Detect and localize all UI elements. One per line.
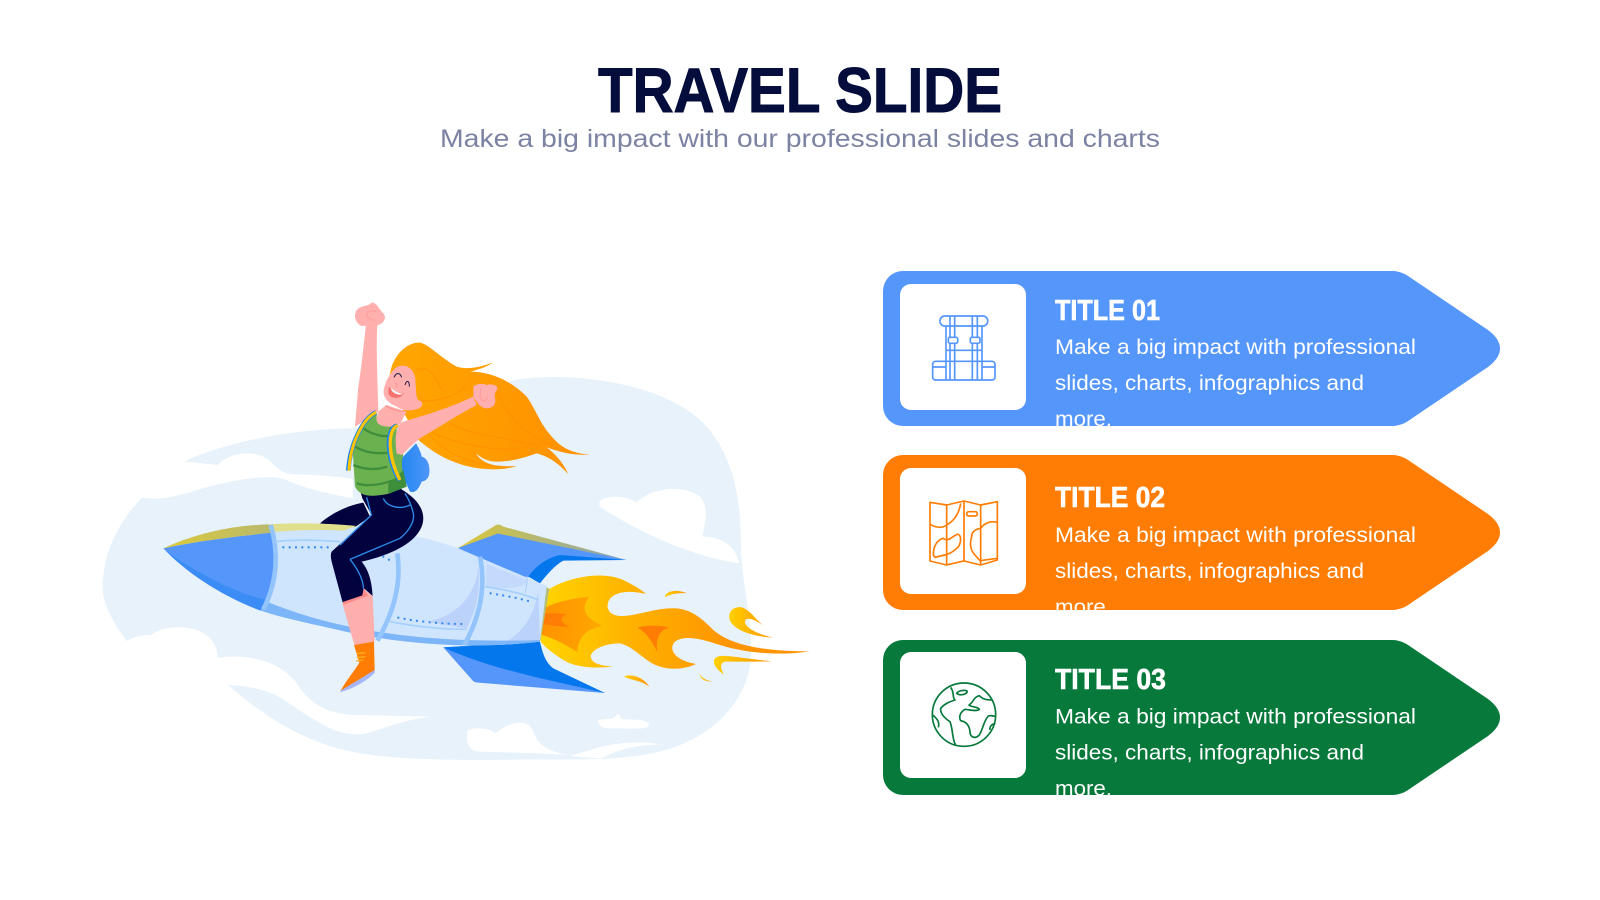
- fist crease: [367, 311, 377, 320]
- pants stitching: [340, 493, 414, 588]
- card body: more.: [1055, 407, 1112, 431]
- hull shading: [427, 565, 479, 628]
- face: [384, 366, 422, 410]
- icon tile: [900, 652, 1026, 778]
- nose cone: [163, 533, 276, 602]
- flame core 2: [637, 626, 669, 652]
- nose: [395, 383, 397, 387]
- icon tile: [900, 284, 1026, 410]
- right strap: [389, 426, 399, 479]
- eyes: [394, 373, 409, 387]
- neck shadow: [386, 406, 403, 411]
- nose shadow: [163, 548, 267, 611]
- flame core: [543, 613, 569, 627]
- card body: [1055, 335, 1416, 431]
- illustration: woman riding a rocket: [98, 303, 810, 760]
- upper fin edge: [458, 525, 627, 560]
- nose top strip: [163, 524, 272, 548]
- card body: slides, charts, infographics and: [1055, 740, 1364, 764]
- icon: globe: [932, 683, 996, 746]
- sky blob: [103, 377, 751, 760]
- card 03: [883, 640, 1500, 800]
- engine ring: [531, 583, 546, 642]
- calf: [343, 589, 375, 645]
- arrow panel: [883, 455, 1500, 610]
- backpack: [397, 443, 429, 492]
- cloud: swoosh: [570, 742, 662, 759]
- hull rings: [263, 525, 482, 645]
- lower fin shadow: [443, 642, 605, 693]
- hull seams: [275, 540, 538, 629]
- front leg: [331, 488, 423, 603]
- card body: more.: [1055, 776, 1112, 800]
- cloud: upper left: [126, 453, 353, 499]
- cloud: bottom: [467, 723, 570, 755]
- icon: folded map: [930, 501, 997, 565]
- hair strands: [415, 369, 573, 467]
- engine ring edge: [538, 587, 549, 641]
- background sky blob and clouds: [98, 377, 751, 760]
- boot sole: [341, 669, 375, 692]
- icon: backpack: [933, 316, 995, 380]
- hand crease: [480, 388, 488, 401]
- boot laces: [356, 653, 365, 661]
- arrow panel: [883, 271, 1500, 426]
- cloud: small: [598, 713, 649, 729]
- card body: Make a big impact with professional: [1055, 523, 1416, 547]
- rear shading: [500, 590, 540, 645]
- cloud: right: [599, 489, 739, 563]
- fist: [355, 303, 385, 326]
- front arm: [396, 397, 477, 455]
- icon tile: [900, 468, 1026, 594]
- top: [353, 413, 407, 496]
- boot: [341, 642, 375, 691]
- card title: TITLE 02: [1055, 482, 1165, 514]
- teeth: [391, 388, 403, 395]
- lower fin: [443, 642, 605, 693]
- rivets: [283, 547, 532, 624]
- card title: TITLE 03: [1055, 664, 1166, 696]
- card body: Make a big impact with professional: [1055, 704, 1416, 728]
- flame: [540, 576, 810, 669]
- mouth: [388, 387, 404, 398]
- card title: TITLE 01: [1055, 295, 1160, 327]
- hull top strip: [269, 523, 357, 532]
- top shadow: [388, 470, 407, 494]
- rear top shading: [486, 564, 527, 588]
- title: TRAVEL SLIDE: [598, 56, 1002, 126]
- card 01: [883, 271, 1500, 431]
- raised arm: [355, 325, 378, 427]
- upper fin shadow: [528, 555, 627, 583]
- calf shadow: [343, 588, 368, 605]
- card body: Make a big impact with professional: [1055, 335, 1416, 359]
- rocket fins and flame: [458, 525, 810, 687]
- subtitle: Make a big impact with our professional slides and charts: [440, 125, 1160, 153]
- hair: [390, 343, 590, 474]
- card 02: [883, 455, 1500, 619]
- rocket body and legs: [163, 488, 605, 693]
- cloud: lower left: [98, 627, 432, 734]
- top stripes: [353, 428, 392, 485]
- arrow panel: [883, 640, 1500, 795]
- hull bottom band: [261, 602, 540, 645]
- flame inner: [542, 597, 603, 652]
- left strap: [348, 412, 376, 471]
- upper body: [348, 303, 590, 496]
- flame droplets: [624, 591, 773, 687]
- upper fin: [458, 533, 627, 577]
- hand: [473, 384, 497, 408]
- neck and chest: [374, 405, 407, 427]
- back leg: [320, 503, 370, 528]
- card body: [1055, 704, 1416, 800]
- card body: slides, charts, infographics and: [1055, 371, 1364, 395]
- card body: more.: [1055, 595, 1112, 619]
- card body: slides, charts, infographics and: [1055, 559, 1364, 583]
- card body: [1055, 523, 1416, 619]
- hull: [163, 523, 547, 645]
